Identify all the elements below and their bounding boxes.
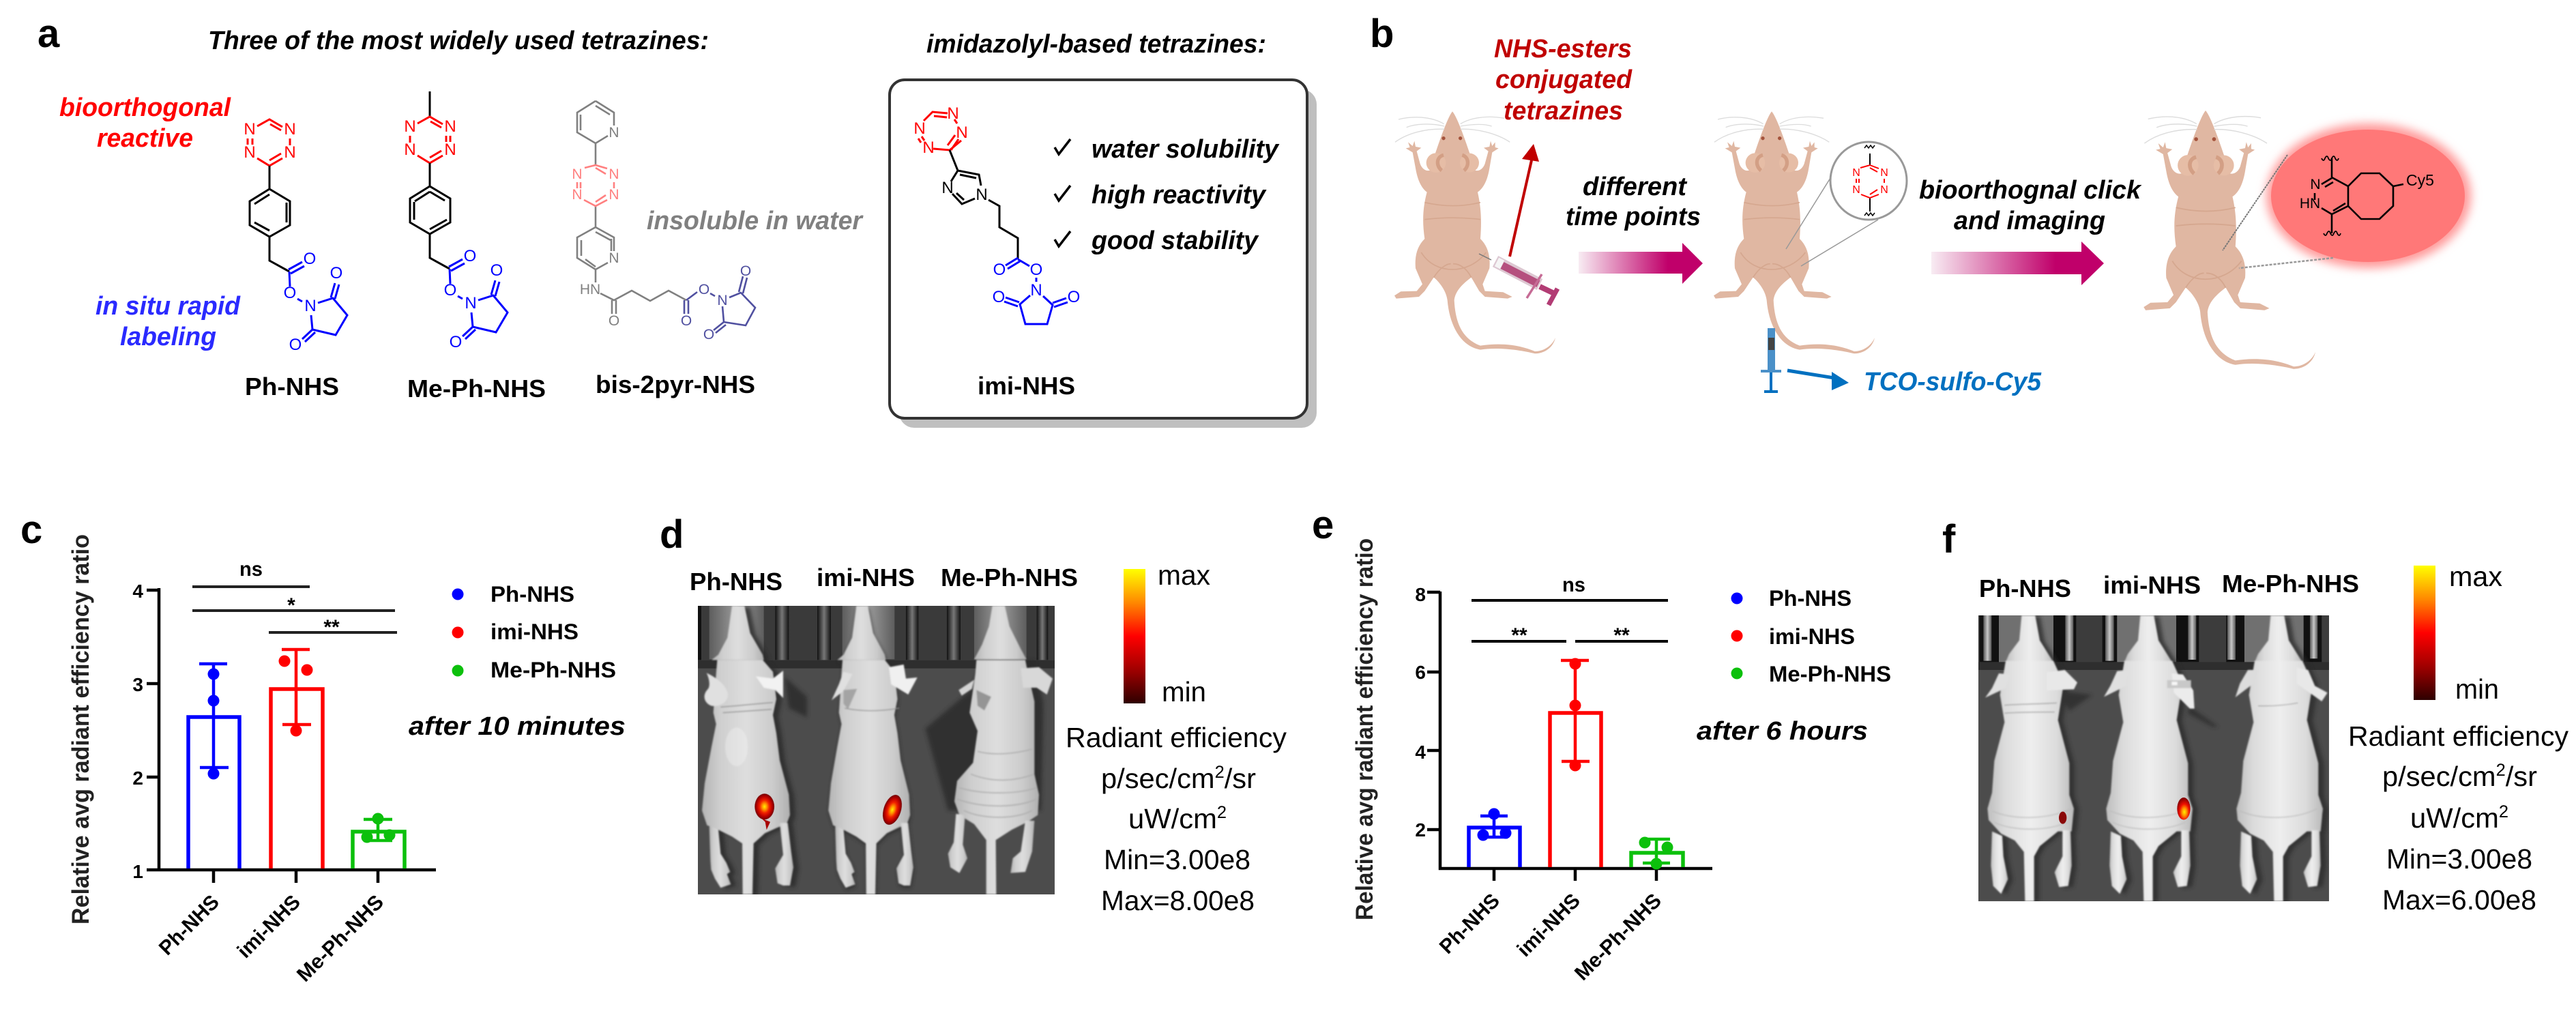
molecule: bis-2pyr-NHS: O [681, 313, 692, 329]
panel: imidazolyl tetrazine box [890, 80, 1317, 428]
scale text f: 2 [2499, 802, 2508, 821]
mouse 3 [2236, 615, 2328, 901]
colorbar labels f [2449, 561, 2502, 705]
checklist [1055, 135, 1280, 255]
callout: tetrazine on tissue: N [1852, 167, 1860, 179]
label: different time points: different [1583, 173, 1687, 201]
scale text f: Max=6.00e8 [2382, 884, 2536, 916]
molecule: bis-2pyr-NHS: N [609, 166, 619, 182]
molecule: imi-NHS: O [993, 288, 1005, 306]
label: insoluble in water: insoluble in water [647, 207, 864, 235]
column headings f: imi-NHS [2103, 571, 2201, 599]
molecule: imi-NHS: N [1030, 281, 1042, 300]
label: bioorthogonal reactive: reactive [97, 124, 193, 153]
y axis title: Relative avg radiant efficiency ratio [68, 534, 94, 924]
significance brackets: ns [1562, 574, 1585, 596]
molecule: Me-Ph-NHS: O [450, 333, 462, 351]
checklist: high reactivity [1092, 181, 1267, 209]
molecule: Ph-NHS: N [244, 143, 256, 162]
molecule: click product: N [2310, 177, 2321, 192]
callout: tetrazine on tissue: N [1880, 184, 1888, 196]
molecule: bis-2pyr-NHS: N [717, 293, 728, 308]
scale text f: uW/cm [2410, 802, 2498, 834]
heading: imidazolyl-based tetrazines: imidazolyl-based tetrazines: [926, 30, 1266, 59]
scale text f: Radiant efficiency [2348, 720, 2569, 752]
checklist: water solubility [1092, 135, 1280, 164]
bar chart c: 4 [132, 581, 143, 602]
arrow: red injection [1510, 144, 1539, 257]
molecule: Me-Ph-NHS: O [444, 281, 456, 300]
x labels: imi-NHS [1513, 890, 1585, 961]
bar: Ph-NHS [188, 664, 239, 868]
molecule: imi-NHS: N [922, 138, 935, 157]
label: NHS-esters conjugated tetrazines: tetrazines [1504, 97, 1623, 126]
callout: tetrazine on tissue: N [1880, 167, 1888, 179]
scale text d: Max=8.00e8 [1101, 885, 1255, 916]
legend c: imi-NHS [491, 619, 579, 644]
panel label a: a [38, 12, 60, 56]
molecule: click product [2300, 156, 2434, 235]
x labels: imi-NHS [233, 891, 305, 963]
mouse 3 [948, 606, 1053, 894]
label: NHS-esters conjugated tetrazines [1494, 35, 1633, 126]
colorbar labels d [1158, 559, 1210, 707]
molecule: bis-2pyr-NHS: O [703, 327, 714, 342]
mouse 3 [2143, 111, 2315, 369]
bar chart e [1351, 538, 1712, 985]
molecule: Me-Ph-NHS: N [444, 117, 456, 136]
molecule: imi-NHS: O [1030, 261, 1042, 279]
colorbar d [1124, 569, 1145, 703]
significance brackets: ns [239, 558, 263, 581]
x labels [1435, 890, 1666, 985]
arrow: blue [1787, 370, 1849, 390]
x labels: Me-Ph-NHS [293, 891, 388, 987]
molecule: imi-NHS [913, 104, 1080, 324]
label: after 6 hours: after 6 hours [1697, 717, 1868, 746]
molecule: Me-Ph-NHS: N [404, 141, 416, 159]
checklist: good stability [1091, 227, 1259, 255]
significance brackets: ** [1613, 624, 1630, 647]
name: imi-NHS: imi-NHS [978, 372, 1075, 400]
image: mice fluorescence f [1978, 615, 2329, 902]
molecule: bis-2pyr-NHS: N [609, 125, 619, 141]
scale text d: /sr [1225, 763, 1256, 794]
label: TCO-sulfo-Cy5: TCO-sulfo-Cy5 [1864, 368, 2042, 396]
x labels: Me-Ph-NHS [1570, 890, 1666, 985]
mouse 1 [1394, 111, 1555, 353]
bar: imi-NHS [1550, 658, 1601, 867]
label: different time points: time points [1566, 203, 1701, 231]
x labels: Ph-NHS [1435, 890, 1504, 959]
scale text f [2348, 720, 2569, 916]
scale text f: p/sec/cm [2382, 761, 2494, 792]
name: bis-2pyr-NHS: bis-2pyr-NHS [596, 370, 755, 398]
column headings d [690, 564, 1078, 596]
mouse 2 [2104, 615, 2195, 901]
callout: tetrazine on tissue: N [1852, 184, 1860, 196]
bar: imi-NHS [271, 649, 323, 868]
scale text d: 2 [1217, 803, 1227, 822]
scale text d [1066, 722, 1287, 916]
molecule: Me-Ph-NHS: N [444, 141, 456, 159]
panel label f: f [1942, 517, 1956, 561]
scale text d: Radiant efficiency [1066, 722, 1287, 753]
molecule: Ph-NHS: O [330, 264, 342, 282]
panel label b: b [1370, 12, 1394, 56]
bar: Me-Ph-NHS [353, 813, 405, 868]
significance brackets [192, 558, 397, 639]
hot spot 1 [755, 793, 774, 830]
label: different time points [1566, 173, 1701, 231]
colorbar labels f: min [2455, 673, 2499, 705]
column headings f: Me-Ph-NHS [2222, 570, 2359, 598]
bar chart c: 3 [132, 674, 143, 695]
label: bioorthogonal reactive [59, 93, 231, 153]
x labels [155, 891, 388, 987]
column headings d: imi-NHS [817, 564, 915, 592]
label: in situ rapid labeling: in situ rapid [96, 292, 241, 321]
molecule: imi-NHS: N [956, 123, 968, 142]
molecule: imi-NHS: N [947, 104, 959, 123]
name: Me-Ph-NHS: Me-Ph-NHS [407, 375, 546, 403]
molecule: Ph-NHS: N [304, 297, 317, 315]
scale text d: p/sec/cm [1101, 763, 1213, 794]
bar chart e: 6 [1415, 662, 1426, 683]
legend c [452, 582, 616, 682]
legend e [1731, 586, 1891, 686]
colorbar labels d: max [1158, 559, 1210, 591]
name: Ph-NHS: Ph-NHS [245, 373, 339, 400]
molecule: Me-Ph-NHS: O [491, 261, 503, 280]
legend e: imi-NHS [1769, 624, 1855, 649]
shadows [1993, 616, 2328, 902]
molecule: Me-Ph-NHS [404, 91, 508, 351]
bar chart c [68, 534, 436, 987]
molecule: bis-2pyr-NHS: N [572, 166, 583, 182]
column headings f [1979, 570, 2359, 602]
molecule: imi-NHS: O [993, 261, 1006, 279]
molecule: Me-Ph-NHS: O [464, 247, 476, 265]
heading: three most widely used tetrazines: Three of the most widely used tetrazines: [208, 27, 709, 55]
hot spot 1 [2059, 812, 2066, 824]
mouse 2 [828, 606, 918, 894]
molecule: bis-2pyr-NHS [572, 101, 755, 342]
molecule: Ph-NHS: O [284, 284, 296, 302]
label: in situ rapid labeling [96, 292, 241, 351]
label: in situ rapid labeling: labeling [120, 323, 216, 351]
molecule: Me-Ph-NHS: N [404, 117, 416, 136]
molecule: imi-NHS: N [976, 186, 988, 204]
arrow: gradient 1 [1579, 243, 1703, 284]
label: NHS-esters conjugated tetrazines: conjugated [1495, 65, 1633, 94]
panel label d: d [660, 512, 684, 557]
molecule: Ph-NHS: N [284, 120, 296, 138]
panel label c: c [20, 508, 42, 552]
molecule: Ph-NHS: N [244, 120, 256, 138]
molecule: Me-Ph-NHS: N [465, 294, 477, 312]
label: bioorthognal click and imaging [1919, 176, 2142, 235]
icon: syringe blue [1761, 328, 1781, 393]
mouse 1 [1985, 615, 2077, 901]
molecule: bis-2pyr-NHS: N [609, 187, 619, 203]
molecule: click product: HN [2300, 196, 2320, 211]
molecule: Ph-NHS: N [284, 143, 296, 162]
label: bioorthogonal reactive: bioorthogonal [59, 93, 231, 122]
significance brackets: * [287, 594, 295, 617]
hot spot 2 [883, 794, 902, 826]
molecule: imi-NHS: N [941, 179, 954, 197]
molecule: click product: Cy5 [2406, 171, 2434, 189]
hot spot 2 [2177, 798, 2191, 820]
significance brackets: ** [1511, 624, 1527, 647]
significance brackets: ** [323, 616, 340, 639]
molecule: Ph-NHS: O [304, 250, 316, 268]
legend c: Ph-NHS [491, 582, 574, 607]
mouse 1 [702, 606, 793, 894]
molecule: bis-2pyr-NHS: N [572, 187, 583, 203]
label: bioorthognal click and imaging: and imaging [1954, 207, 2105, 235]
icon: syringe pink [1479, 254, 1557, 305]
legend e: Ph-NHS [1769, 586, 1852, 611]
y axis title: Relative avg radiant efficiency ratio [1351, 538, 1378, 920]
molecule: bis-2pyr-NHS: O [609, 313, 619, 329]
bar: Me-Ph-NHS [1631, 836, 1683, 869]
scale text d: uW/cm [1128, 803, 1216, 834]
image: mice fluorescence d [698, 606, 1055, 896]
scale text f: 2 [2496, 761, 2506, 780]
mouse 2 [1714, 111, 1875, 353]
bar: Ph-NHS [1469, 808, 1520, 867]
label: NHS-esters conjugated tetrazines: NHS-esters [1494, 35, 1632, 63]
molecule: Ph-NHS [244, 119, 347, 354]
scale text f: Min=3.00e8 [2386, 843, 2532, 875]
column headings f: Ph-NHS [1979, 574, 2071, 602]
molecule: Ph-NHS: O [289, 336, 302, 354]
column headings d: Ph-NHS [690, 568, 782, 596]
colorbar labels f: max [2449, 561, 2502, 592]
bar chart c: 2 [132, 768, 143, 789]
label: after 10 minutes: after 10 minutes [409, 712, 626, 741]
legend c: Me-Ph-NHS [491, 658, 616, 682]
molecule: bis-2pyr-NHS: O [699, 282, 709, 297]
bar chart c: 1 [132, 861, 143, 882]
bar chart e: 2 [1415, 819, 1426, 841]
callout: tetrazine on tissue [1786, 142, 1907, 266]
panel label e: e [1312, 503, 1334, 547]
colorbar f [2414, 566, 2435, 700]
legend e: Me-Ph-NHS [1769, 662, 1891, 686]
arrow: gradient 2 [1931, 242, 2104, 285]
glow: imaging red spot [2223, 123, 2471, 268]
scale text d: Min=3.00e8 [1104, 844, 1250, 875]
significance brackets [1472, 574, 1668, 647]
bar chart e: 8 [1415, 584, 1426, 605]
molecule: bis-2pyr-NHS: HN [580, 282, 600, 297]
label: bioorthognal click and imaging: bioorthognal click [1919, 176, 2142, 205]
scale text d: 2 [1215, 763, 1225, 782]
molecule: bis-2pyr-NHS: N [609, 250, 619, 266]
x labels: Ph-NHS [155, 891, 224, 960]
scale text f: /sr [2506, 761, 2537, 792]
molecule: imi-NHS: O [1068, 288, 1080, 306]
molecule: bis-2pyr-NHS: O [740, 263, 751, 279]
column headings d: Me-Ph-NHS [941, 564, 1078, 592]
bar chart e: 4 [1415, 742, 1426, 763]
molecule: imi-NHS: N [913, 119, 926, 138]
colorbar labels d: min [1162, 676, 1206, 707]
shadows [707, 607, 1044, 896]
